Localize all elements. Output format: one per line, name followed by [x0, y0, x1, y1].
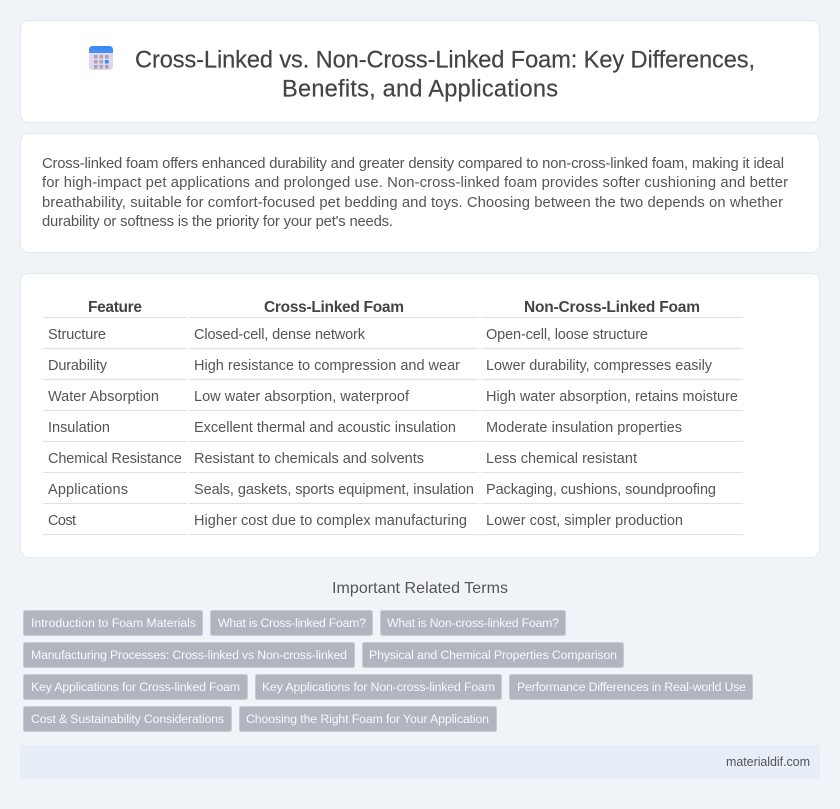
- table header: Non-Cross-Linked Foam: [524, 299, 700, 316]
- row: applications: Applications: [48, 482, 128, 498]
- title: Cross-Linked vs. Non-Cross-Linked Foam: Key Differences,: [135, 48, 755, 74]
- panel: summary paragraph: for high-impact pet applications and prolonged use. Non-cross-linked foam provides softer cushioning and better: [42, 175, 788, 191]
- row: water absorption: High water absorption, retains moisture: [486, 389, 738, 405]
- tags: related terms: Key Applications for Cross-linked Foam: [31, 680, 240, 694]
- table header: [88, 299, 700, 316]
- icon: calendar grid: [89, 46, 113, 70]
- tags: related terms: Choosing the Right Foam for Your Application: [246, 712, 489, 726]
- footer: [20, 745, 820, 779]
- row: insulation: Moderate insulation properties: [486, 420, 682, 436]
- row: durability: High resistance to compression and wear: [194, 358, 460, 374]
- tags: related terms: Performance Differences in Real-world Use: [517, 680, 746, 694]
- row: cost: Lower cost, simpler production: [486, 513, 683, 529]
- row: insulation: Excellent thermal and acoustic insulation: [194, 420, 456, 436]
- panel: summary paragraph: [20, 134, 820, 252]
- row: structure: [48, 327, 648, 343]
- tags: related terms: What is Cross-linked Foam?: [218, 616, 366, 630]
- row: water absorption: Water Absorption: [48, 389, 159, 405]
- panel: summary paragraph: breathability, suitable for comfort-focused pet bedding and toys. Choosing between the two depends on whether: [42, 195, 783, 211]
- tags: related terms: [24, 610, 752, 732]
- table header: Cross-Linked Foam: [264, 299, 404, 316]
- row: cost: [48, 513, 683, 529]
- row: chemical resistance: Resistant to chemicals and solvents: [194, 451, 424, 467]
- row: cost: Cost: [48, 513, 76, 529]
- panel: comparison table: [20, 274, 820, 558]
- row: structure: Closed-cell, dense network: [194, 327, 366, 343]
- tags: related terms: Manufacturing Processes: Cross-linked vs Non-cross-linked: [31, 648, 347, 662]
- heading: related terms: Important Related Terms: [332, 580, 508, 597]
- tags: related terms: Cost & Sustainability Considerations: [31, 712, 224, 726]
- table header: Feature: [88, 299, 142, 316]
- panel: header: [20, 20, 820, 122]
- row: insulation: Insulation: [48, 420, 110, 436]
- row: chemical resistance: Chemical Resistance: [48, 451, 182, 467]
- tags: related terms: Introduction to Foam Materials: [31, 616, 196, 630]
- footer: materialdif.com: [726, 755, 810, 769]
- row: durability: Durability: [48, 358, 108, 374]
- panel: summary paragraph: Cross-linked foam offers enhanced durability and greater density compared to non-cross-linked foam, making it ideal: [42, 156, 784, 172]
- row: durability: [48, 358, 713, 374]
- row: chemical resistance: [48, 451, 637, 467]
- title: [135, 48, 755, 102]
- row: structure: Structure: [48, 327, 106, 343]
- tags: related terms: Key Applications for Non-cross-linked Foam: [262, 680, 495, 694]
- tags: related terms: What is Non-cross-linked Foam?: [387, 616, 559, 630]
- row: structure: Open-cell, loose structure: [486, 327, 648, 343]
- row: insulation: [48, 420, 682, 436]
- row: applications: Packaging, cushions, soundproofing: [486, 482, 716, 498]
- row: chemical resistance: Less chemical resistant: [486, 451, 637, 467]
- tags: related terms: Physical and Chemical Properties Comparison: [369, 648, 617, 662]
- row: applications: Seals, gaskets, sports equipment, insulation: [194, 482, 474, 498]
- row: water absorption: Low water absorption, waterproof: [194, 389, 410, 405]
- row: durability: Lower durability, compresses easily: [486, 358, 713, 374]
- row: water absorption: [48, 389, 738, 405]
- row: cost: Higher cost due to complex manufacturing: [194, 513, 467, 529]
- row: applications: [48, 482, 716, 498]
- title: Benefits, and Applications: [282, 76, 558, 102]
- panel: summary paragraph: durability or softness is the priority for your pet's needs.: [42, 214, 393, 230]
